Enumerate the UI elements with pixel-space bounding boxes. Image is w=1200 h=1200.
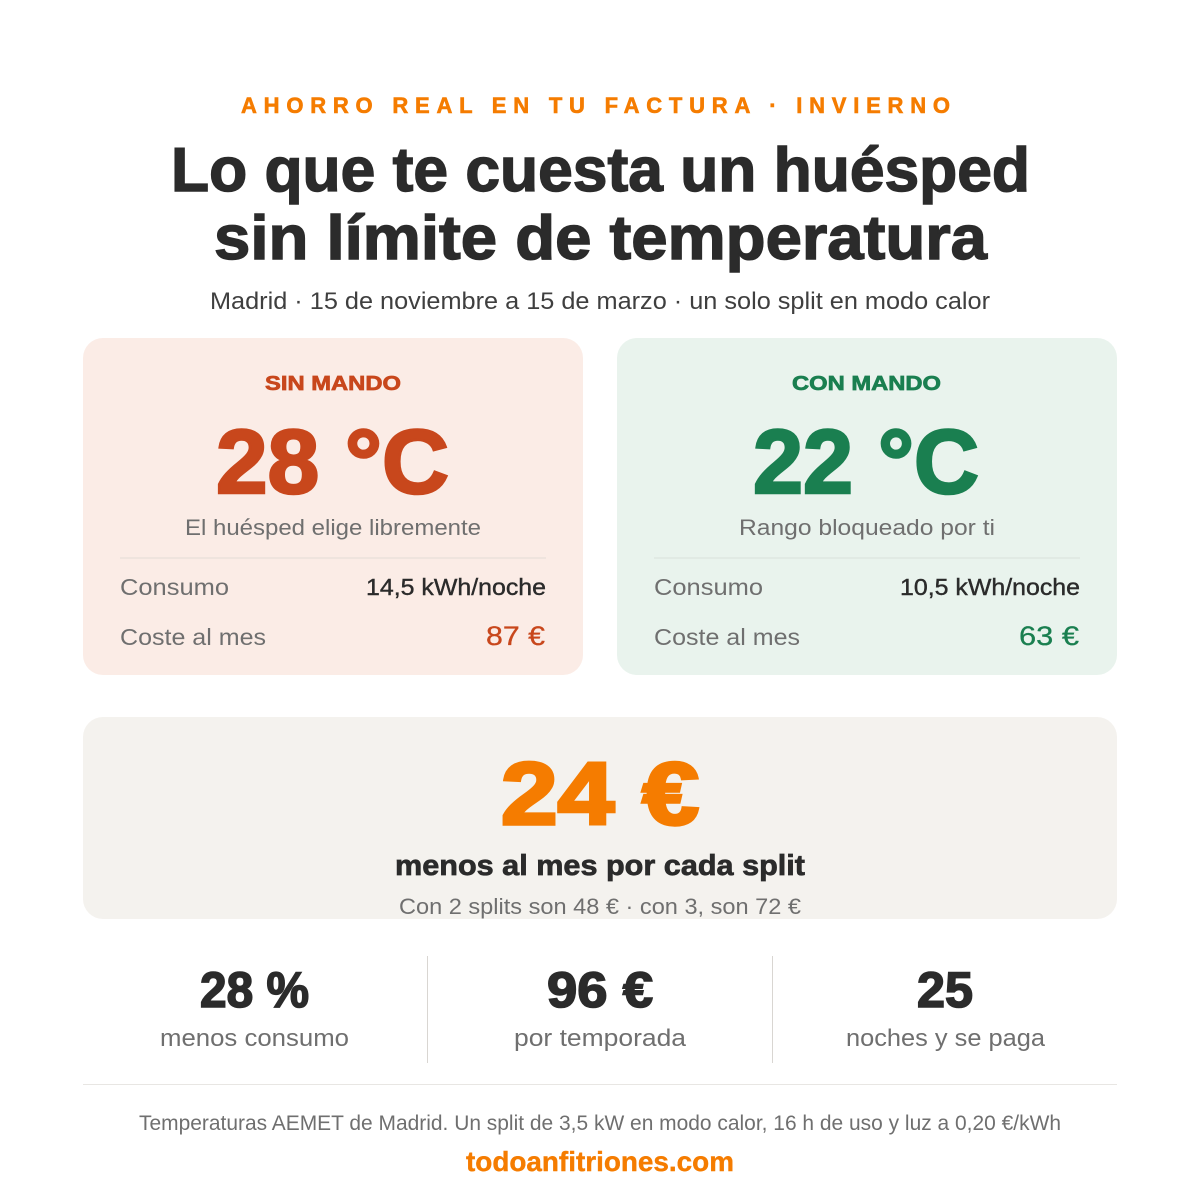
stat: por temporada [514, 962, 687, 1052]
stat: por temporada: por temporada [514, 1025, 687, 1052]
row: coste al mes: Coste al mes [120, 624, 266, 650]
label: sin mando: SIN MANDO [265, 373, 401, 395]
row: consumo: 14,5 kWh/noche [366, 574, 546, 600]
footnote: Temperaturas AEMET de Madrid. Un split de 3,5 kW en modo calor, 16 h de uso y luz a 0,20 €/kWh [139, 1112, 1061, 1135]
temperature: 22 °C: 22 °C [753, 412, 979, 513]
stat: menos consumo: 28 % [200, 962, 309, 1018]
kicker: AHORRO REAL EN TU FACTURA · INVIERNO [241, 93, 950, 118]
description: El huésped elige libremente [185, 515, 481, 540]
description: Rango bloqueado por ti [739, 515, 995, 540]
row: coste al mes [120, 621, 545, 651]
label: con mando: CON MANDO [792, 373, 941, 395]
stat: noches y se paga [846, 962, 1046, 1052]
panel: con mando [617, 338, 1117, 675]
temperature: 28 °C: 28 °C [216, 412, 449, 513]
stat: por temporada: 96 € [547, 962, 653, 1018]
title [171, 136, 1030, 273]
row: coste al mes: 63 € [1019, 621, 1079, 651]
title: sin límite de temperatura [214, 204, 988, 273]
row: consumo: Consumo [120, 574, 229, 600]
big number: 24 €: 24 € [501, 744, 699, 843]
stat: menos consumo: menos consumo [160, 1025, 349, 1052]
row: consumo [120, 574, 546, 600]
savings note: Con 2 splits son 48 € · con 3, son 72 € [399, 894, 801, 919]
stat: noches y se paga: noches y se paga [846, 1025, 1046, 1052]
row: coste al mes [654, 621, 1079, 651]
subtitle: Madrid · 15 de noviembre a 15 de marzo · un solo split en modo calor [210, 288, 990, 315]
title: Lo que te cuesta un huésped [171, 136, 1030, 205]
row: coste al mes: Coste al mes [654, 624, 800, 650]
row: consumo: Consumo [654, 574, 763, 600]
row: consumo [654, 574, 1080, 600]
row: coste al mes: 87 € [486, 621, 545, 651]
savings heading: menos al mes por cada split [395, 850, 805, 882]
stat: menos consumo [160, 962, 349, 1052]
panel: ahorro [83, 717, 1117, 919]
website: todoanfitriones.com [466, 1146, 734, 1177]
row: consumo: 10,5 kWh/noche [900, 574, 1080, 600]
stat: noches y se paga: 25 [917, 962, 973, 1018]
panel: sin mando [83, 338, 583, 675]
